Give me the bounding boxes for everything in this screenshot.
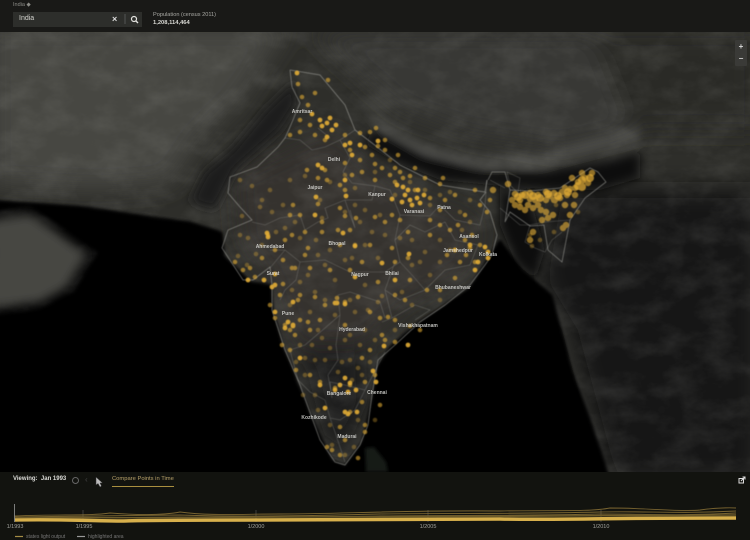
bright lights: [248, 73, 488, 414]
legend: [15, 534, 124, 540]
city labels: Surat: [267, 271, 280, 277]
expand icon: [738, 476, 746, 484]
city labels: Patna: [437, 205, 451, 211]
city labels: Bhilai: [385, 271, 399, 277]
axis labels: [7, 524, 609, 530]
info icon: [72, 477, 79, 484]
city labels: Hyderabad: [339, 327, 365, 333]
axis labels: 1/1993: [7, 524, 23, 530]
city labels: Delhi: [328, 157, 341, 163]
city labels: Pune: [282, 311, 294, 317]
city labels: Bangalore: [327, 391, 351, 397]
national border: [222, 70, 606, 465]
state output lines: [15, 508, 736, 518]
search box: [13, 12, 142, 27]
bottom timeline panel: [0, 472, 750, 540]
zoom in: +: [739, 42, 743, 51]
timeline chart: [7, 504, 736, 540]
arabian peninsula: [0, 214, 86, 308]
state borders: [252, 128, 570, 462]
medium lights: [235, 80, 490, 458]
city labels: Nagpur: [351, 272, 369, 278]
viewing label: Viewing: Jan 1993: [13, 476, 66, 482]
city labels: Kanpur: [368, 192, 386, 198]
search text: India: [19, 15, 34, 22]
axis labels: 1/2005: [420, 524, 436, 530]
zoom controls: [735, 40, 747, 66]
city labels: Bhopal: [329, 241, 346, 247]
city labels: Kolkata: [479, 252, 497, 258]
compare tab: [112, 476, 174, 487]
zoom out: −: [739, 54, 743, 63]
population label: Population (census 2011): [153, 12, 216, 18]
city labels: Bhubaneshwar: [435, 285, 471, 291]
city labels: Kozhikode: [301, 415, 327, 421]
city labels: Vishakhapatnam: [398, 323, 438, 329]
ocean overlay keeps sea black: [0, 200, 610, 480]
tick marks: [14, 504, 601, 522]
axis labels: 1/1995: [76, 524, 92, 530]
previous arrow: ‹: [85, 475, 88, 484]
city labels: Madurai: [337, 434, 357, 440]
legend: states light output: [26, 534, 66, 540]
city labels: Varanasi: [404, 209, 425, 215]
city labels: Asansol: [459, 234, 479, 240]
city labels: Jaipur: [307, 185, 323, 191]
city labels: Amritsar: [292, 109, 312, 115]
dim lights: [238, 160, 578, 455]
compare tab: Compare Points in Time: [112, 476, 174, 482]
population value: 1,208,114,464: [153, 20, 190, 26]
north-east lights: [493, 173, 592, 240]
axis labels: 1/2010: [593, 524, 609, 530]
city labels: [256, 109, 497, 440]
breadcrumb: India ◆: [13, 2, 31, 8]
highlighted output band: [15, 518, 736, 521]
city labels: Chennai: [367, 390, 387, 396]
axis labels: 1/2000: [248, 524, 264, 530]
clear icon: ×: [112, 14, 117, 24]
divider and search icon: [124, 14, 138, 24]
top header bar: [0, 0, 750, 32]
cursor icon: [96, 477, 102, 487]
city labels: Ahmedabad: [256, 244, 284, 250]
city lights: [235, 73, 592, 458]
legend: highlighted area: [88, 534, 124, 540]
city labels: Jamshedpur: [443, 248, 473, 254]
